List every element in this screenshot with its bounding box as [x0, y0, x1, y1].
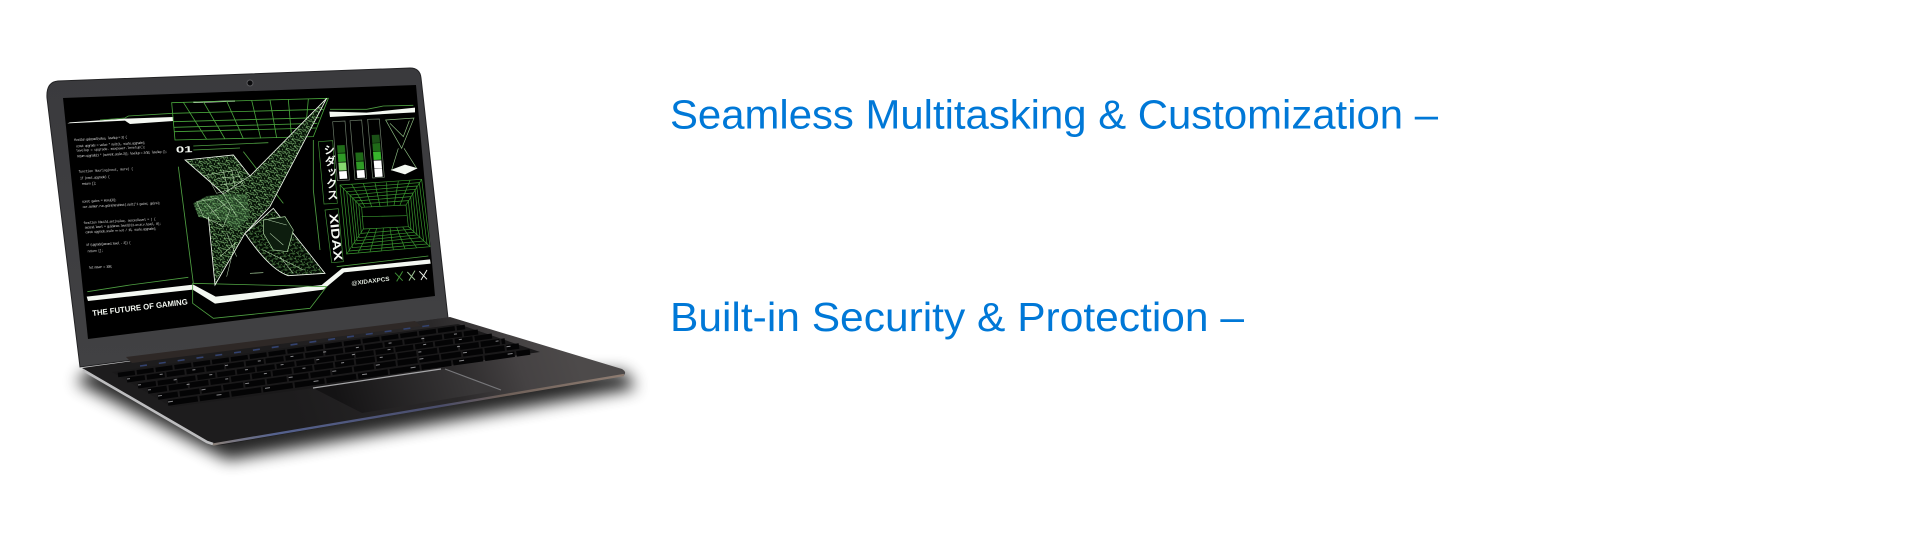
hourglass wireframe — [386, 118, 417, 174]
big X emblem — [185, 98, 327, 285]
XIDAX vertical logo — [325, 209, 345, 263]
code text: return []; — [87, 248, 103, 254]
laptop shadow — [76, 370, 636, 460]
code text: return []; — [82, 181, 97, 187]
code text: function gainpool(value, levelup = 3) { — [74, 135, 127, 143]
code text: cur.summer.run.gain(menuNext).mult('1 gains; gains); — [83, 201, 161, 210]
code text — [74, 135, 167, 271]
katakana label: シダックス — [322, 144, 339, 201]
code text: function hburing(next, more) { — [78, 167, 133, 175]
level bars — [333, 119, 384, 181]
mini X logos — [395, 270, 427, 281]
green accent lines — [87, 105, 428, 318]
laptop lid — [47, 68, 448, 367]
heading: multitasking: Seamless Multitasking & Customization – — [670, 92, 1438, 138]
hinge strip — [126, 321, 421, 363]
social handle: @XIDAXPCS — [351, 277, 390, 287]
white bars of the screen frame — [67, 100, 431, 304]
small screen label 01: 01 — [176, 144, 193, 155]
laptop base deck — [82, 317, 625, 445]
XIDAX vertical logo: XIDAX — [326, 213, 345, 261]
code text: const gains = menu[0]; — [82, 198, 117, 205]
front edge trim — [83, 370, 624, 444]
tunnel grid — [340, 179, 430, 254]
keyboard — [112, 324, 540, 407]
webcam — [247, 80, 253, 86]
code text: const upgrade.scale == w.6 / 15, scale.upgrade); — [85, 227, 157, 235]
code text: function hbuild.ant(value, secondlevel = ) { — [83, 217, 156, 226]
code text: const upgrade = value * mult(1, scale.upgrade); — [76, 141, 146, 149]
screen — [63, 85, 435, 339]
touchpad — [313, 369, 501, 413]
heading: security: Built-in Security & Protection – — [670, 294, 1244, 340]
code text: if (upgrade[second.level - 3]) { — [86, 241, 131, 248]
code text: return upgrade(1 * (current.scale.3)); levelup = 3/16; levelup (); — [77, 150, 167, 159]
code text: second.level = guidance.level(hit-on.m.v.level, 8); — [85, 222, 161, 231]
laptop illustration — [47, 68, 636, 460]
THE FUTURE OF GAMING caption: THE FUTURE OF GAMING — [92, 297, 188, 318]
code text: levelup = upgrade. maxpower.levelup(); — [76, 145, 146, 154]
code text: if (next.upgrade) { — [80, 175, 110, 181]
top perspective grid — [172, 98, 328, 140]
code text: let mover = 100; — [89, 264, 113, 271]
